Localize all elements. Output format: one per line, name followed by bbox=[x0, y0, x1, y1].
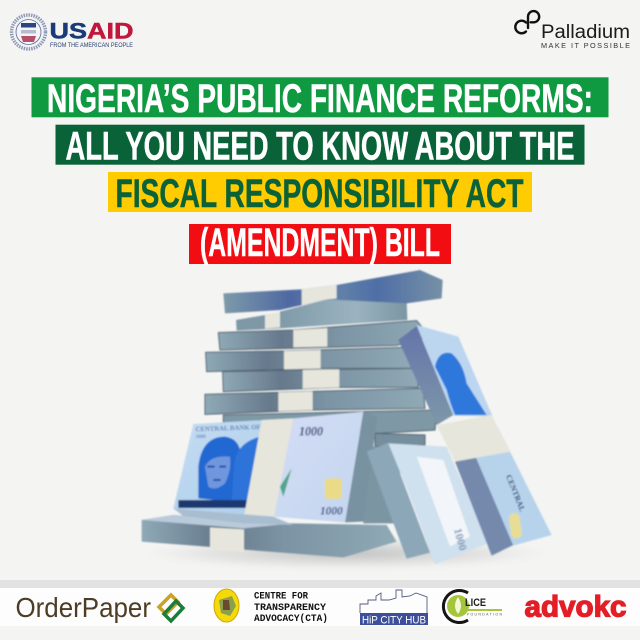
text: CTA name: ADVOCACY(CTA) bbox=[254, 613, 328, 625]
bundle: front standing with portrait: 1000 bbox=[299, 424, 324, 438]
text: CTA name: CENTRE FOR bbox=[254, 592, 308, 602]
logo: advokc: advokc bbox=[524, 590, 626, 624]
bundle: front standing with portrait: 1000 bbox=[196, 435, 206, 440]
bundle layer: middle left stacks bbox=[205, 321, 437, 523]
bundle layer: top bbox=[223, 270, 443, 331]
icon: C ring and green disc bbox=[443, 590, 469, 622]
wordmark box bbox=[360, 613, 428, 625]
footer: partner logos strip bbox=[0, 580, 640, 626]
heading line 4: (AMENDMENT) BILL bbox=[200, 221, 440, 265]
title: banner headings bbox=[32, 77, 608, 265]
banknote text: CENTRAL BANK OF bbox=[195, 424, 261, 433]
icon: Palladium linked loops bbox=[515, 11, 539, 33]
logo: HiP City Hub bbox=[360, 590, 428, 626]
logo: USAID bbox=[12, 15, 134, 49]
bundle: front standing with portrait: 1000 bbox=[320, 506, 343, 518]
ground shadow bbox=[140, 537, 553, 569]
icon: skyline bbox=[360, 590, 427, 613]
logo: Palladium bbox=[515, 11, 630, 50]
wordmark: HiP CITY HUB bbox=[362, 614, 426, 626]
text: CTA name: TRANSPARENCY bbox=[254, 603, 326, 614]
icon: CTA seal bbox=[214, 589, 239, 622]
footer background bbox=[0, 580, 640, 588]
logo: Centre for Transparency Advocacy bbox=[214, 589, 328, 625]
logo: OrderPaper: OrderPaper bbox=[16, 592, 151, 623]
divider and tagline bbox=[466, 609, 502, 611]
wordmark: Palladium: Palladium bbox=[541, 22, 630, 43]
bundle: leaning right bbox=[398, 325, 552, 556]
text: CTA name bbox=[254, 592, 328, 625]
wordmark: USAID: US AID bbox=[50, 18, 134, 44]
bundle: leaning centre: 1000 bbox=[451, 527, 468, 552]
bundle: flat bottom bbox=[142, 515, 397, 557]
tagline: from the american people: FROM THE AMERICAN PEOPLE bbox=[50, 42, 133, 49]
tagline: make it possible: MAKE IT POSSIBLE bbox=[541, 41, 630, 50]
footer panel bbox=[0, 588, 640, 626]
logo: CLICE Foundation: FOUNDATION bbox=[467, 612, 502, 616]
portrait on banknote bbox=[178, 437, 260, 508]
logo: CLICE Foundation bbox=[443, 590, 502, 622]
heading line 4 bbox=[189, 221, 451, 265]
icon: USAID seal bbox=[12, 15, 46, 49]
bundle: leaning centre bbox=[367, 443, 488, 564]
bundle: leaning right: CENTRAL bbox=[504, 473, 527, 513]
wordmark: LICE bbox=[465, 597, 486, 609]
illustration: stack of naira banknotes bbox=[140, 270, 553, 569]
bundle: front standing with portrait bbox=[173, 412, 377, 525]
icon: OrderPaper knot bbox=[159, 595, 183, 621]
